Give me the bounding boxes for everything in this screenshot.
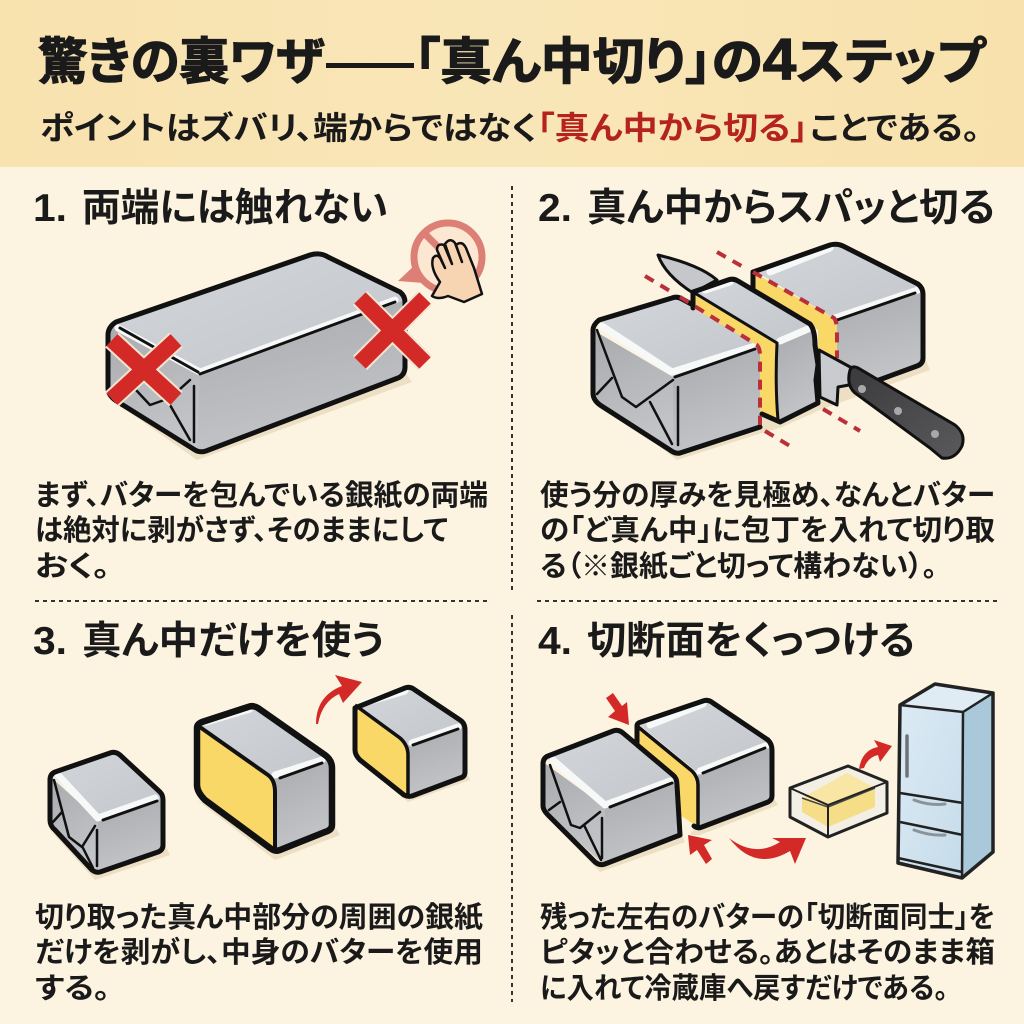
body text: step 3 <box>35 901 483 1005</box>
title <box>38 27 987 92</box>
illustration: right butter block <box>637 700 778 835</box>
heading: step 4: 4. <box>538 620 572 663</box>
heading: step 3: 3. <box>33 620 67 663</box>
body text: step 1: まず、バターを包んでいる銀紙の両端 <box>35 479 488 512</box>
illustration: butter box <box>790 766 887 837</box>
arrow: press down <box>606 693 629 725</box>
heading: step 4: 切断面をくっつける <box>587 620 915 663</box>
body text: step 4: 残った左右のバターの「切断面同士」を <box>540 901 995 934</box>
subtitle: 「真ん中から切る」 <box>537 110 808 146</box>
title: 「真ん中切り」の4ステップ <box>414 27 987 92</box>
illustration: left wrapped end <box>50 752 170 880</box>
subtitle <box>40 110 980 146</box>
body text: step 1: おく。 <box>35 551 110 583</box>
left block <box>593 297 760 453</box>
body text: step 1: は絶対に剥がさず、そのままにして <box>35 513 448 547</box>
body text: step 1 <box>35 479 488 583</box>
body text: step 4: ピタッと合わせる。あとはそのまま箱 <box>540 936 995 969</box>
arrow: up to right block <box>316 675 362 724</box>
icon: red X right <box>360 298 425 363</box>
arrow: to fridge <box>859 740 892 769</box>
body text: step 4: に入れて冷蔵庫へ戻すだけである。 <box>540 972 948 1005</box>
panel: step 3 <box>33 620 483 1005</box>
panel: step 1 <box>33 187 488 583</box>
illustration: wrapped butter with X marks <box>108 254 412 460</box>
title: 驚きの裏ワザ <box>38 34 325 90</box>
panel: step 2 <box>538 187 995 583</box>
center slice <box>645 276 818 446</box>
illustration: refrigerator <box>898 683 993 878</box>
subtitle: ことである。 <box>810 110 980 146</box>
heading: step 2: 2. <box>538 187 572 230</box>
heading: step 1: 両端には触れない <box>82 187 388 230</box>
illustration: center slice with butter <box>197 706 340 860</box>
arrow: press up <box>688 835 712 864</box>
heading: step 3: 真ん中だけを使う <box>82 620 384 663</box>
panel: step 4 <box>538 620 995 1005</box>
illustration: right slice with butter <box>355 687 470 802</box>
header band <box>0 0 1024 167</box>
knife blade front and handle <box>819 350 963 458</box>
body text: step 3: 切り取った真ん中部分の周囲の銀紙 <box>35 901 483 934</box>
right block <box>717 244 923 388</box>
icon: no-touch hand <box>398 223 482 302</box>
title: ―― <box>326 34 414 90</box>
body text: step 2 <box>540 479 995 583</box>
body text: step 2: の「ど真ん中」に包丁を入れて切り取 <box>540 514 995 547</box>
knife blade tip <box>658 255 717 293</box>
illustration: left butter block <box>543 730 685 872</box>
body text: step 4 <box>540 901 995 1005</box>
body text: step 3: だけを剥がし、中身のバターを使用 <box>35 935 483 969</box>
arrow: to container <box>729 838 806 864</box>
icon: red X left <box>112 340 176 399</box>
subtitle: ポイントはズバリ、端からではなく <box>40 110 537 146</box>
illustration: butter cut with knife <box>593 244 963 460</box>
body text: step 2: る（※銀紙ごと切って構わない）。 <box>540 549 937 583</box>
body text: step 3: する。 <box>35 973 110 1005</box>
heading: step 1: 1. <box>33 187 67 230</box>
heading: step 2: 真ん中からスパッと切る <box>587 187 995 230</box>
body text: step 2: 使う分の厚みを見極め、なんとバター <box>540 479 995 512</box>
